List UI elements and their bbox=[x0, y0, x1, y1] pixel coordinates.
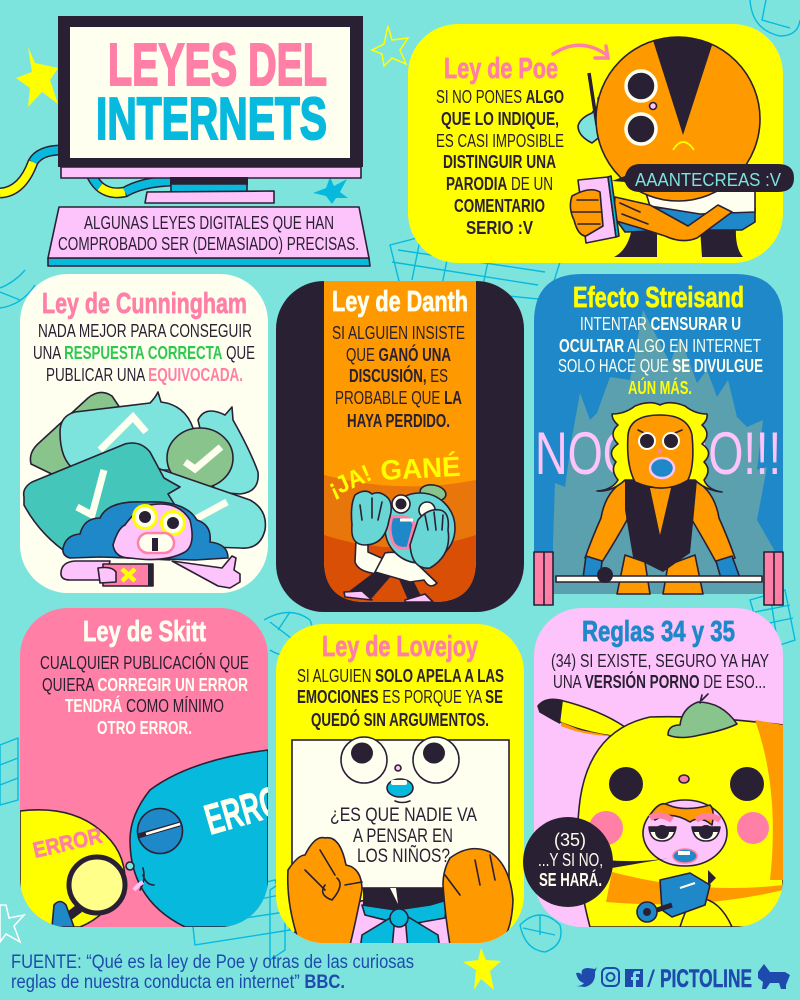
icon: bull bbox=[758, 964, 790, 989]
shout text: ja gané bbox=[324, 451, 461, 502]
text block: reglas: UNA VERSIÓN PORNO DE ESO... bbox=[553, 671, 766, 692]
text block: streisand: INTENTAR CENSURAR U bbox=[580, 314, 741, 334]
text block: skitt bbox=[40, 652, 249, 738]
decorative stars bbox=[0, 26, 501, 990]
text block: danth: HAYA PERDIDO. bbox=[347, 411, 450, 431]
title monitor bbox=[58, 16, 363, 203]
subtitle text bbox=[58, 213, 359, 254]
text block: streisand: OCULTAR ALGO EN INTERNET bbox=[559, 336, 761, 356]
icon: twitter bbox=[576, 967, 597, 987]
illustration: pikachu bbox=[538, 694, 783, 927]
illustration: error characters bbox=[20, 749, 268, 927]
character: poe bbox=[570, 34, 794, 257]
text block: reglas bbox=[551, 651, 769, 692]
illustration: error characters: ERROR bbox=[200, 772, 305, 845]
panel: efecto streisand bbox=[534, 274, 783, 605]
subtitle text: COMPROBADO SER (DEMASIADO) PRECISAS. bbox=[58, 234, 359, 254]
text block: streisand: AÚN MÁS. bbox=[628, 377, 692, 398]
heading: streisand: Efecto Streisand bbox=[573, 282, 744, 314]
heading: reglas: Reglas 34 y 35 bbox=[582, 616, 735, 648]
arrow: pink bbox=[553, 45, 608, 58]
source footer: FUENTE: “Qué es la ley de Poe y otras de las curiosas bbox=[11, 952, 414, 973]
wordmark: PICTOLINE bbox=[660, 965, 752, 993]
heading: skitt: Ley de Skitt bbox=[83, 616, 206, 648]
text block: skitt: QUIERA CORREGIR UN ERROR bbox=[42, 675, 248, 695]
text block: lovejoy: QUEDÓ SIN ARGUMENTOS. bbox=[311, 709, 489, 730]
panel: ley de lovejoy bbox=[276, 624, 524, 950]
keyboard subtitle bbox=[48, 207, 370, 266]
sign text: ¿ES QUE NADIE VA bbox=[330, 805, 477, 826]
cables bbox=[0, 150, 172, 193]
character: weightlifter bbox=[583, 403, 740, 594]
heading: internets: INTERNETS bbox=[96, 86, 327, 152]
panel: reglas 34 y 35 bbox=[523, 608, 783, 927]
text block: danth: PROBABLE QUE LA bbox=[335, 388, 462, 408]
source footer: reglas de nuestra conducta en internet” BBC. bbox=[11, 972, 345, 993]
icon: facebook bbox=[625, 969, 643, 987]
heading: danth: Ley de Danth bbox=[332, 286, 468, 318]
text block: poe bbox=[436, 87, 564, 238]
text block: poe: ES CASI IMPOSIBLE bbox=[436, 131, 564, 151]
source footer bbox=[11, 952, 414, 993]
sign text: A PENSAR EN bbox=[353, 826, 453, 847]
panel: ley de skitt bbox=[20, 608, 268, 927]
text block: poe: COMENTARIO bbox=[454, 196, 545, 216]
text block: poe: QUE LO INDIQUE, bbox=[441, 109, 559, 129]
speech bubble: aaantecreas: AAANTECREAS :V bbox=[635, 170, 781, 190]
heading: cunningham: Ley de Cunningham bbox=[42, 288, 247, 320]
illustration: sign with face bbox=[288, 737, 513, 950]
flame aura bbox=[553, 310, 780, 594]
text block: danth: SI ALGUIEN INSISTE bbox=[332, 323, 465, 343]
speech bubble: 35 bbox=[523, 817, 613, 907]
panel: ley de danth bbox=[276, 281, 524, 612]
text block: cunningham bbox=[33, 321, 255, 385]
heading: ley de poe: Ley de Poe bbox=[444, 53, 558, 85]
speech bubble: 35: (35) bbox=[554, 830, 586, 850]
text block: streisand: SOLO HACE QUE SE DIVULGUE bbox=[558, 356, 763, 376]
text block: poe: SI NO PONES ALGO bbox=[436, 87, 564, 107]
sign text bbox=[331, 808, 477, 862]
illustration: error characters: ERROR bbox=[31, 823, 104, 863]
text block: cunningham: NADA MEJOR PARA CONSEGUIR bbox=[38, 321, 252, 341]
orange strip with gradient bands bbox=[324, 281, 476, 602]
text block: poe: SERIO :V bbox=[466, 218, 533, 238]
barbell bbox=[534, 552, 783, 605]
heading: leyes del: LEYES DEL bbox=[108, 32, 327, 98]
slash divider: / bbox=[647, 966, 655, 993]
text block: cunningham: PUBLICAR UNA EQUIVOCADA. bbox=[46, 365, 243, 385]
brand: pictoline bbox=[576, 964, 790, 993]
speech bubble: 35: SE HARÁ. bbox=[539, 869, 602, 890]
right fist bbox=[443, 849, 513, 945]
text block: lovejoy: EMOCIONES ES PORQUE YA SE bbox=[297, 687, 503, 707]
text block: danth: DISCUSIÓN, ES bbox=[349, 365, 448, 386]
speech bubble: 35: ...Y SI NO, bbox=[538, 850, 603, 870]
heading: lovejoy: Ley de Lovejoy bbox=[322, 631, 478, 663]
text block: poe: DISTINGUIR UNA bbox=[443, 152, 556, 172]
text block: lovejoy: SI ALGUIEN SOLO APELA A LAS bbox=[297, 666, 504, 686]
icon: instagram bbox=[602, 968, 619, 986]
text block: skitt: OTRO ERROR. bbox=[97, 718, 192, 738]
text block: poe: PARODIA DE UN bbox=[446, 174, 553, 194]
character: shouting bbox=[344, 483, 455, 602]
left fist bbox=[288, 838, 362, 945]
text block: cunningham: UNA RESPUESTA CORRECTA QUE bbox=[33, 343, 255, 363]
shout text: ja gané: GANÉ bbox=[380, 451, 461, 486]
shout text: ja gané: ¡JA! bbox=[324, 460, 376, 502]
character: blue haired girl bbox=[61, 502, 240, 588]
text block: skitt: CUALQUIER PUBLICACIÓN QUE bbox=[40, 652, 249, 673]
text block: skitt: TENDRÁ COMO MÍNIMO bbox=[65, 695, 224, 716]
text block: danth: QUE GANÓ UNA bbox=[346, 344, 451, 365]
text block: lovejoy bbox=[297, 666, 504, 730]
text block: danth bbox=[332, 323, 465, 431]
subtitle text: ALGUNAS LEYES DIGITALES QUE HAN bbox=[84, 213, 334, 233]
sign text: LOS NIÑOS? bbox=[357, 845, 450, 867]
panel: ley de cunningham bbox=[20, 274, 268, 593]
speech bubble: aaantecreas bbox=[612, 164, 794, 192]
illustration: speech bubbles with checks bbox=[24, 392, 265, 560]
text block: streisand bbox=[558, 314, 763, 398]
panel: ley de poe bbox=[408, 24, 794, 263]
